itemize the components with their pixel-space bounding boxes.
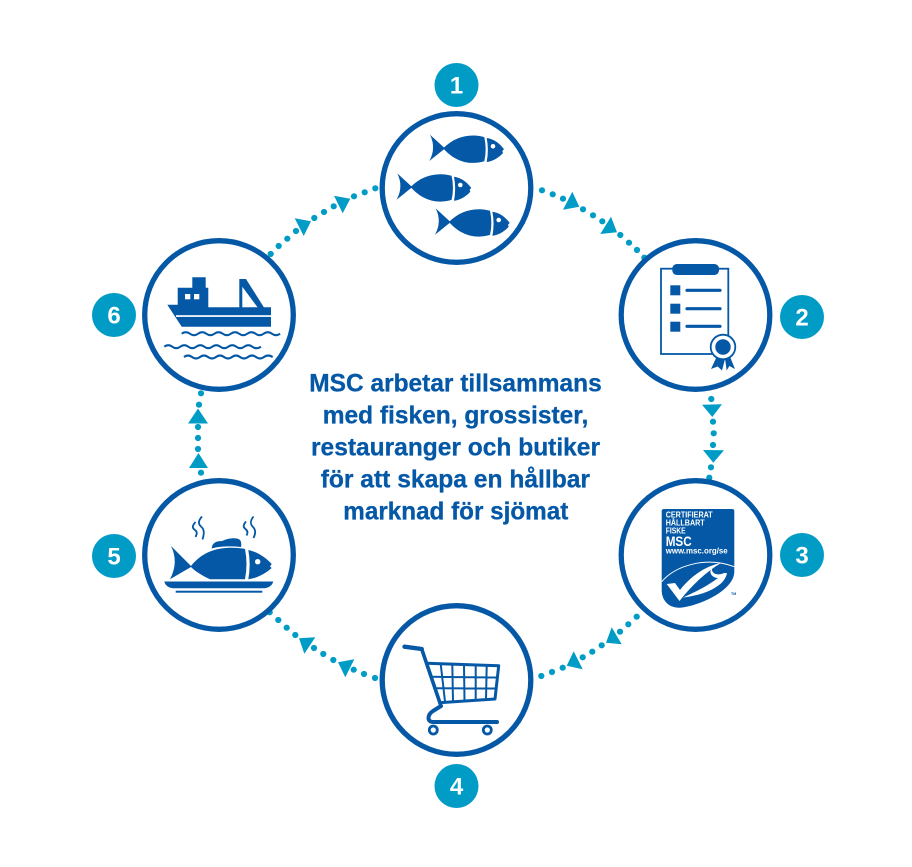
central text: med fisken, grossister, xyxy=(323,402,588,430)
step 3: MSC label xyxy=(621,481,824,629)
icon: MSC ecolabel: MSC xyxy=(666,533,692,549)
central text: MSC arbetar tillsammans xyxy=(309,370,602,398)
badge 4 xyxy=(434,764,478,808)
ring 5 xyxy=(145,481,293,629)
badge 2: 2 xyxy=(795,304,809,332)
ring 3 xyxy=(621,481,770,629)
badge 4: 4 xyxy=(450,774,464,800)
badge 5: 5 xyxy=(107,544,121,570)
step 1: fish stock xyxy=(382,63,531,262)
ring 6 xyxy=(145,241,293,389)
central text: restauranger och butiker xyxy=(311,434,600,462)
step 6: fishing vessel xyxy=(92,241,293,389)
badge 5 xyxy=(92,534,136,578)
arrow: step 4 to 5 xyxy=(267,609,378,681)
arrow: step 1 to 2 xyxy=(539,187,647,261)
icon: MSC ecolabel: CERTIFIERAT xyxy=(666,510,713,520)
icon: MSC ecolabel: TM xyxy=(731,592,736,596)
icon: MSC ecolabel: www.msc.org/se xyxy=(665,546,728,555)
icon: ship and waves xyxy=(164,277,280,358)
central text xyxy=(309,370,602,526)
arrow: step 3 to 4 xyxy=(538,614,640,679)
badge 1 xyxy=(434,63,478,107)
step 4: shopping cart xyxy=(382,606,531,808)
icon: clipboard with rosette xyxy=(661,264,735,370)
badge 1: 1 xyxy=(450,72,463,100)
icon: three fish xyxy=(397,135,510,237)
icon: fish on a plate xyxy=(164,516,273,593)
icon: MSC ecolabel: FISKE xyxy=(666,527,686,536)
badge 6: 6 xyxy=(107,302,121,330)
badge 6 xyxy=(92,293,136,337)
central text: marknad för sjömat xyxy=(343,498,569,526)
badge 3: 3 xyxy=(795,542,809,570)
ring 1 xyxy=(382,114,531,262)
badge 3 xyxy=(780,533,824,577)
step 5: served fish xyxy=(92,481,293,629)
step 2: certification checklist xyxy=(621,241,824,389)
ring 4 xyxy=(382,606,531,754)
arrow: step 2 to 3 xyxy=(702,396,724,481)
icon: MSC ecolabel: HÅLLBART xyxy=(666,518,705,528)
ring 2 xyxy=(621,241,770,389)
icon: MSC ecolabel xyxy=(662,509,736,608)
badge 2 xyxy=(780,295,824,339)
icon: cart xyxy=(404,647,499,734)
central text: för att skapa en hållbar xyxy=(321,466,590,494)
arrow: step 6 to 1 xyxy=(268,185,378,257)
arrow: step 5 to 6 xyxy=(188,390,208,476)
